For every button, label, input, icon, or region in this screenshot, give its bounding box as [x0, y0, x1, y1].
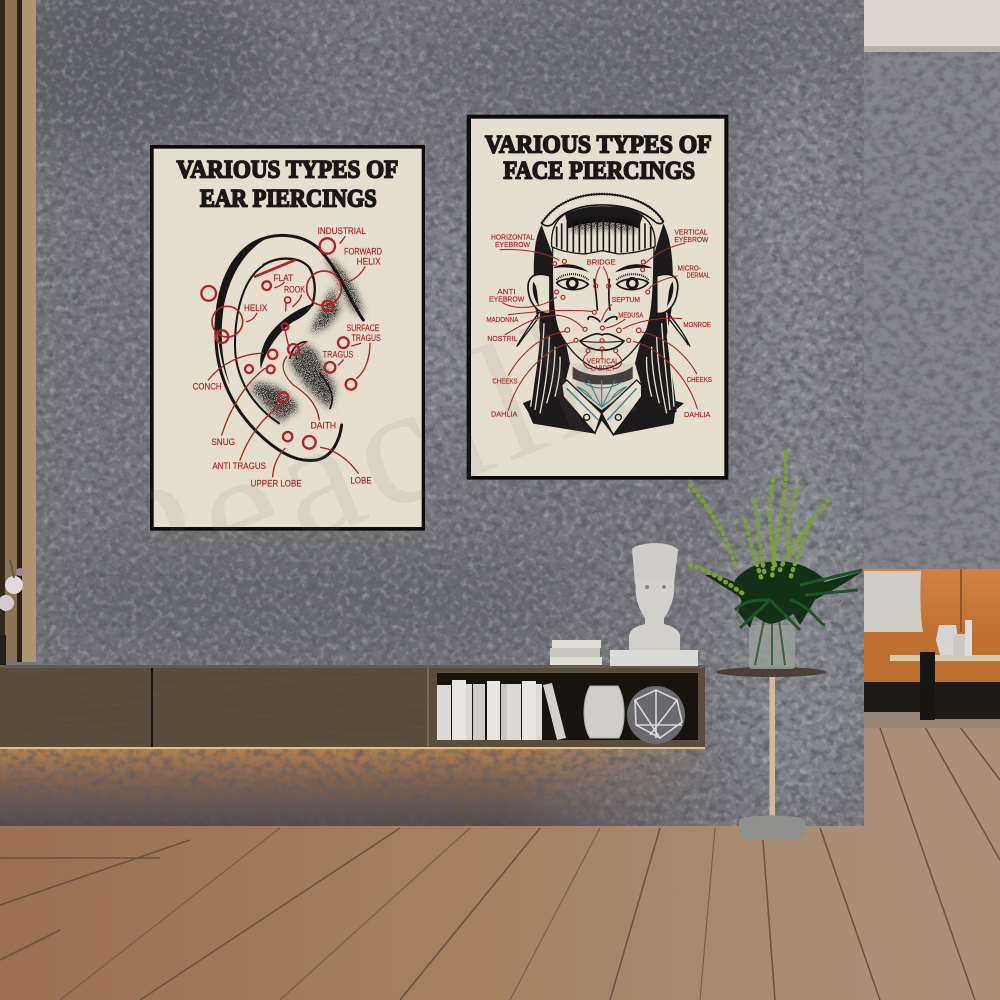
face poster title: FACE PIERCINGS [503, 157, 695, 185]
ribbed vase on shelf [584, 686, 624, 738]
face labels: DAHLIA [684, 412, 711, 419]
wall-mounted cabinet [0, 665, 705, 749]
poster frame and paper [150, 145, 425, 531]
face labels: EYEBROW [495, 242, 530, 249]
face piercing markers [553, 259, 650, 353]
fringe [542, 194, 663, 254]
ear labels: FORWARD [344, 246, 382, 256]
eyes [557, 274, 648, 290]
face labels: MONROE [683, 322, 711, 329]
poster: face piercings [467, 115, 728, 480]
wood slat column at left [0, 0, 36, 665]
ear labels: HELIX [244, 303, 267, 313]
books on shelf [437, 680, 566, 740]
face labels: LABRET [591, 365, 616, 372]
face [552, 245, 654, 369]
ear labels: TRAGUS [323, 349, 353, 359]
nose [588, 279, 617, 322]
face poster title: VARIOUS TYPES OF [485, 131, 712, 159]
face labels: CHEEKS [687, 377, 712, 384]
lips [580, 334, 624, 350]
shoulders [523, 387, 683, 435]
face poster title [485, 131, 712, 185]
glass geometric sphere [627, 686, 685, 744]
ear labels: DAITH [311, 420, 336, 430]
orange sofa [864, 569, 1000, 728]
ear poster title: EAR PIERCINGS [200, 184, 377, 212]
stacked books on cabinet [550, 640, 602, 665]
ear labels: LOBE [350, 475, 372, 485]
side table [716, 667, 826, 840]
face labels: EYEBROW [489, 296, 525, 303]
long side hair [517, 223, 690, 420]
ear labels: TRAGUS [352, 333, 381, 343]
face labels: CHEEKS [492, 379, 518, 386]
face leader lines [500, 243, 697, 410]
room background: wall [0, 0, 880, 830]
ear labels: HELIX [357, 256, 381, 266]
face poster frame and paper [467, 115, 728, 480]
ear labels: ANTI TRAGUS [212, 461, 266, 471]
ear labels: ROOK [284, 284, 305, 294]
face labels [486, 230, 712, 419]
ear poster title: VARIOUS TYPES OF [177, 156, 398, 184]
face labels: DAHLIA [491, 412, 518, 419]
ear labels: SNUG [211, 437, 235, 447]
poster: ear piercings [150, 145, 425, 531]
face labels: VERTICAL [674, 230, 708, 237]
coffee table with vases [890, 620, 1000, 720]
flower at far left [0, 560, 24, 611]
face labels: EYEBROW [674, 237, 709, 244]
face labels: MADONNA [486, 317, 519, 324]
ear labels: UPPER LOBE [251, 479, 302, 489]
face labels: BRIDGE [587, 260, 616, 267]
potted plant in glass vase [690, 452, 862, 669]
collar and neck [562, 363, 642, 435]
face labels: HORIZONTAL [491, 235, 534, 242]
face labels: MICRO- [678, 266, 702, 273]
spider-web tattoo [577, 380, 627, 407]
wood floor [0, 727, 1000, 1000]
portrait drawing [517, 194, 690, 435]
watermark: Peacilk [73, 267, 660, 649]
ear drawing [216, 235, 363, 461]
ear leader lines [208, 237, 370, 477]
bust sculpture [610, 543, 698, 666]
ear labels: CONCH [193, 381, 222, 391]
face labels: MEDUSA [618, 313, 644, 320]
flat piercing bar [254, 260, 295, 277]
face labels: ANTI [497, 289, 516, 296]
under-cabinet light glow [0, 748, 720, 826]
ear labels [193, 226, 382, 489]
ears [528, 274, 678, 313]
face labels: DERMAL [687, 272, 710, 279]
ear labels: INDUSTRIAL [318, 226, 366, 236]
ear poster title [177, 156, 398, 212]
face labels: NOSTRIL [487, 336, 517, 343]
ear labels: SURFACE [347, 323, 379, 333]
background: far wall and ceiling at right [864, 0, 1000, 572]
face labels: VERTICAL [587, 359, 619, 366]
ear labels: FLAT [273, 273, 294, 283]
eyebrows [553, 264, 652, 272]
sofa cushion [864, 571, 923, 632]
face labels: SEPTUM [612, 297, 640, 304]
piercing markers [201, 238, 356, 449]
